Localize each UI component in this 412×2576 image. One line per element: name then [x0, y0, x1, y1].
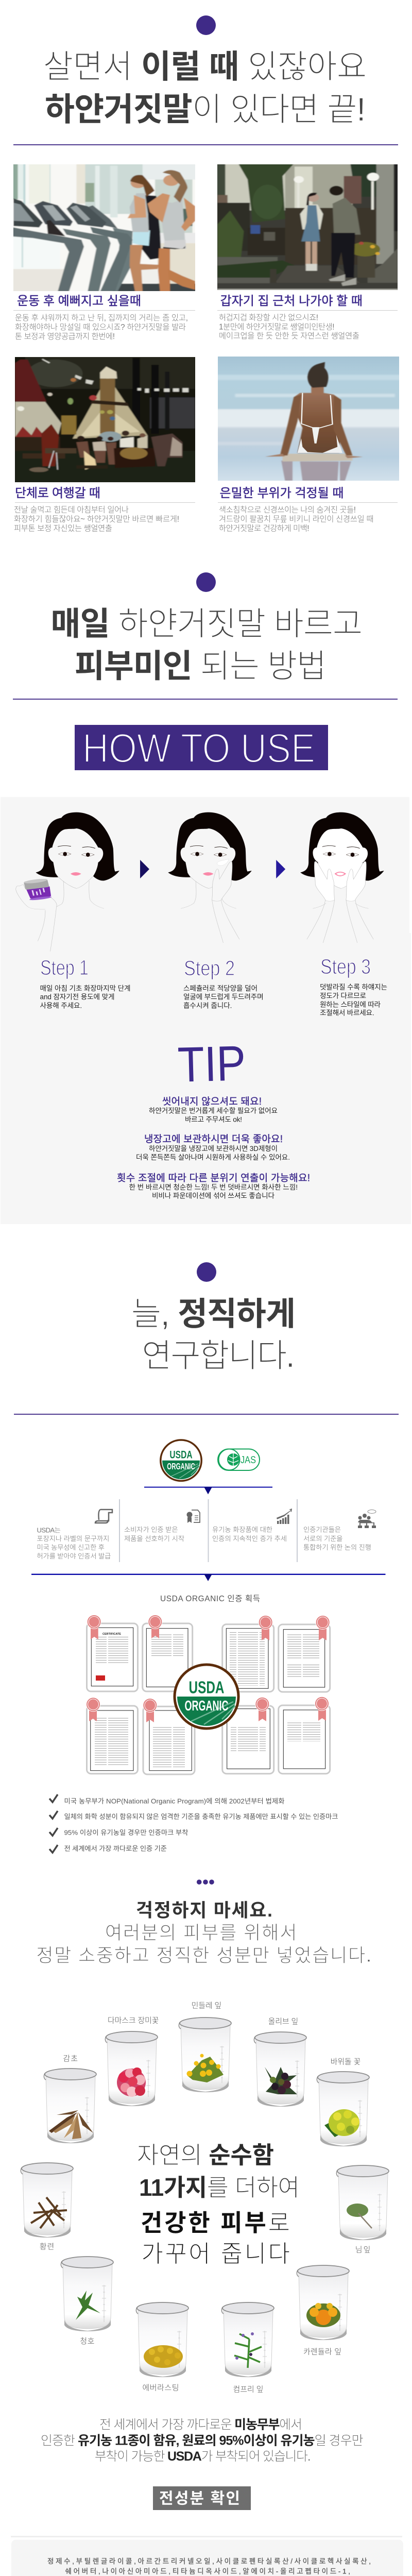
pointer line top	[144, 1487, 272, 1494]
paragraph: USDA statement: 부착이 가능한 USDA가 부착되어 있습니다.	[95, 2449, 311, 2464]
section dot	[196, 572, 216, 592]
step 3 text: 조절해서 바르세요.	[320, 1009, 374, 1017]
checklist: 미국 농무부가 NOP(National Organic Program)에 의해 2002년부터 법제화	[64, 1797, 284, 1805]
large USDA organic seal: USDA	[188, 1677, 225, 1697]
certificate 1: CERTIFICATE	[102, 1633, 121, 1636]
tip: adjust layers: 횟수 조절에 따라 다른 분위기 연출이 가능해요!	[117, 1173, 310, 1184]
beaker: sweet wormwood	[61, 2257, 113, 2346]
beaker: calendula leaf: 카렌듈라 잎	[303, 2347, 341, 2357]
beaker: comfrey leaf	[221, 2302, 274, 2394]
step 3 text: 덧발라질 수록 하얘지는	[320, 984, 387, 991]
beaker: everlasting	[136, 2302, 188, 2393]
title: always researching honestly: 늘, 정직하게	[131, 1296, 296, 1332]
column 3 text	[212, 1526, 287, 1543]
beaker: sweet wormwood: 청호	[80, 2337, 94, 2346]
tip: adjust layers	[117, 1173, 310, 1199]
logo: USDA organic: ORGANIC	[167, 1461, 195, 1471]
checklist: 일체의 화학 성분이 함유되지 않은 엄격한 기준을 충족한 유기농 제품에만 표시할 수 있는 인증마크	[64, 1813, 338, 1821]
large USDA organic seal: ORGANIC	[184, 1698, 229, 1714]
caption: after exercise: 운동 후 예뻐지고 싶을때	[17, 294, 141, 308]
section: honest research and certification	[14, 1262, 399, 1854]
caption: group trip	[14, 486, 195, 533]
beaker: coptis: 황련	[40, 2242, 54, 2251]
beaker: coptis	[21, 2163, 73, 2251]
column 1 text: 미국 농무성에 신고한 후	[37, 1544, 105, 1551]
beaker: rock flower: 바위돌 꽃	[331, 2058, 360, 2066]
slogan: natural purity	[137, 2142, 300, 2267]
caption: quick errand: 메이크업을 한 듯 안한 듯 자연스런 쌩얼연출	[219, 332, 359, 341]
button: view all ingredients: 전성분 확인	[159, 2490, 240, 2507]
column 4 text: 통합하기 위한 논의 진행	[303, 1544, 371, 1551]
icon: document scroll	[95, 1510, 112, 1523]
beaker: comfrey leaf: 컴프리 잎	[233, 2385, 264, 2394]
title: how to become beautiful	[50, 606, 363, 685]
title: when you need it: 하얀거짓말이 있다면 끝!	[45, 92, 366, 128]
title: how to become beautiful: 매일 하얀거짓말 바르고	[50, 606, 363, 642]
icon: people network	[358, 1510, 376, 1528]
logo: USDA organic: USDA	[169, 1449, 193, 1461]
caption: private areas	[218, 486, 398, 533]
heading: USDA organic certified: USDA ORGANIC 인증 획득	[160, 1594, 260, 1603]
step 3 text: 원하는 스타일에 따라	[320, 1001, 381, 1008]
panel: full ingredient list: 쉐어버터,나이아신아미아드,티타늄디옥사이드,알에이치-올리고펩타이드-1,	[65, 2568, 350, 2575]
caption: group trip: 화장하기 힘들잖아요~ 하얀거짓말만 바르면 빠르게!	[14, 515, 179, 524]
button: view all ingredients	[153, 2486, 251, 2510]
certificate 5	[87, 1698, 138, 1774]
logo: JAS	[218, 1449, 260, 1470]
beaker: dandelion leaf: 민들레 잎	[192, 2001, 221, 2010]
paragraph: USDA statement	[41, 2417, 364, 2464]
checklist	[49, 1794, 338, 1853]
certificate 8	[279, 1697, 330, 1774]
tip: no need to wash off: 씻어내지 않으셔도 돼요!	[162, 1096, 262, 1107]
tip: keep refrigerated: 냉장고에 보관하시면 더욱 좋아요!	[144, 1133, 283, 1145]
heading: don't worry: 걱정하지 마세요.	[136, 1900, 272, 1921]
photo: woman sitting at the beach	[218, 357, 399, 481]
certificate 2	[143, 1615, 193, 1691]
step 1 text: 매일 아침 기초 화장마지막 단계	[40, 985, 131, 992]
caption: private areas: 하얀거짓말로 건강하게 미백!	[219, 524, 309, 533]
arrow: step 2 to 3	[276, 860, 285, 878]
step 2 text: 얼굴에 부드럽게 두드려주며	[183, 993, 264, 1001]
step 1 figure with jar	[16, 812, 119, 952]
certificate 1	[87, 1615, 138, 1691]
certificate 3	[222, 1616, 274, 1692]
tip: keep refrigerated: 하얀거짓말을 냉장고에 보관하시면 3D제형이	[149, 1145, 278, 1153]
step 2 text: 흡수시켜 줍니다.	[183, 1002, 232, 1010]
step 1 text: 사용해 주세요.	[40, 1002, 82, 1010]
beaker: rock flower	[317, 2058, 369, 2146]
step 3 text: Step 3	[320, 955, 371, 978]
column 2 text: 제품을 선호하기 시작	[124, 1535, 184, 1543]
section: how to use	[1, 572, 411, 1224]
step 2 text: Step 2	[184, 956, 235, 980]
column 1 text	[37, 1526, 111, 1560]
paragraph: USDA statement: 전 세계에서 가장 까다로운 미농무부에서	[99, 2417, 302, 2432]
column 4 text	[303, 1526, 371, 1551]
certificate 7	[222, 1697, 274, 1774]
caption: quick errand: 허겁지겁 화장할 시간 없으시죠!	[219, 313, 318, 323]
tip: no need to wash off: 하얀거짓말은 번거롭게 세수할 필요가 없어요	[149, 1107, 278, 1115]
section dot	[197, 1262, 216, 1282]
step 3 text: 정도가 다르므로	[320, 992, 366, 999]
column 2 text	[124, 1526, 184, 1543]
step 2 text: 스페츌러로 적당양을 덜어	[183, 985, 258, 992]
caption: after exercise: 화장해야하나 망설일 때 있으시죠? 하얀거짓말을 발라	[15, 323, 186, 332]
column 3 text: 유기농 화장품에 대한	[212, 1526, 272, 1534]
beaker: licorice: 감초	[63, 2055, 78, 2063]
large USDA organic seal	[175, 1665, 238, 1728]
slogan: natural purity: 건강한 피부로	[141, 2209, 290, 2236]
tip: keep refrigerated	[136, 1133, 290, 1161]
caption: quick errand: 1분만에 하얀거짓말로 쌩얼미인탄생!	[219, 323, 335, 332]
checklist: 전 세계에서 가장 까다로운 인증 기준	[64, 1844, 167, 1852]
section dot	[196, 15, 216, 35]
beaker: dandelion leaf	[179, 2001, 231, 2092]
three dots	[197, 1879, 214, 1885]
column 3 text: 인증의 지속적인 증가 추세	[212, 1535, 287, 1543]
certificates grid	[87, 1615, 330, 1774]
paragraph: USDA statement: 인증한 유기농 11종이 함유, 원료의 95%이상이 유기농일 경우만	[41, 2434, 364, 2448]
slogan: natural purity: 11가지를 더하여	[139, 2174, 300, 2201]
beaker: olive leaf: 올리브 잎	[268, 2018, 298, 2026]
column 1 text: 허가를 받아야 인증서 발급	[37, 1552, 111, 1560]
tip: adjust layers: 한 번 바르시면 청순한 느낌! 두 번 덧바르시면 화사한 느낌!	[129, 1183, 298, 1191]
step 1 text	[40, 956, 131, 1010]
tip: keep refrigerated: 더욱 쫀득쫀득 살아나며 시원하게 사용하실 수 있어요.	[136, 1154, 290, 1161]
step 3 figure with cream on face	[300, 812, 384, 943]
beaker: damask rose: 다마스크 장미꽃	[108, 2016, 159, 2025]
title: always researching honestly: 연구합니다.	[142, 1338, 295, 1374]
caption: after exercise: 운동 후 샤워까지 하고 난 뒤, 집까지의 거리는 좀 있고,	[15, 314, 188, 323]
beaker: neem leaf	[336, 2165, 389, 2255]
photo: couple at night by the gate	[217, 164, 398, 290]
caption: private areas: 은밀한 부위가 걱정될 때	[219, 486, 344, 500]
column 4 text: 서로의 기준을	[303, 1535, 343, 1543]
tip: adjust layers: 비비나 파운데이션에 섞어 쓰셔도 좋습니다	[152, 1192, 274, 1199]
heading: don't worry	[36, 1900, 371, 1966]
beaker: damask rose	[105, 2016, 159, 2106]
panel: full ingredient list: 정제수,부틸렌글라이콜,아르간트리커넬오일,사이클로펜타실록산/사이클로헥사실록산,	[47, 2557, 371, 2565]
caption: quick errand	[217, 294, 398, 341]
title: when you need it: 살면서 이럴 때 있잖아요	[43, 49, 367, 85]
illustration: three application steps	[15, 812, 384, 952]
logo: USDA organic	[161, 1440, 201, 1481]
panel: usage steps and tips	[1, 797, 411, 1224]
certificate 6	[143, 1698, 195, 1774]
caption: group trip: 피부톤 보정 자신있는 쌩얼연출	[14, 524, 112, 533]
caption: private areas: 색소침착으로 신경쓰이는 나의 숨겨진 곳들!	[219, 506, 356, 514]
logo: JAS: JAS	[241, 1455, 256, 1466]
title: when you need it	[43, 49, 367, 128]
banner: how to use: HOW TO USE	[82, 725, 315, 771]
step 3 text	[320, 955, 387, 1017]
arrow: step 1 to 2	[140, 860, 149, 878]
column 2 text: 소비자가 인증 받은	[124, 1526, 178, 1534]
heading: don't worry: 여러분의 피부를 위해서	[105, 1922, 297, 1943]
column 4 text: 인증기관들은	[303, 1526, 341, 1534]
icon: growth chart	[277, 1509, 292, 1524]
TIP heading: TIP	[177, 1036, 246, 1093]
beaker: licorice	[44, 2055, 96, 2143]
tip: no need to wash off	[149, 1096, 278, 1123]
beaker: calendula leaf	[297, 2265, 349, 2357]
beaker: neem leaf: 님 잎	[355, 2245, 370, 2255]
beaker: everlasting: 에버라스팅	[142, 2383, 179, 2393]
caption: group trip: 전날 술먹고 힘든데 아침부터 일어나	[14, 506, 129, 514]
step 1 text: and 잠자기전 용도에 맞게	[40, 993, 114, 1001]
caption: after exercise	[13, 294, 195, 341]
USDA facts columns	[37, 1499, 376, 1562]
step 2 figure applying cream	[168, 812, 252, 943]
beaker: olive leaf	[254, 2018, 306, 2107]
pointer line bottom	[31, 1574, 385, 1581]
column 1 text: 포장지나 라벨의 문구까지	[37, 1535, 109, 1543]
slogan: natural purity: 자연의 순수함	[137, 2142, 274, 2168]
section: natural ingredients	[11, 1879, 403, 2576]
icon: certificate	[186, 1510, 200, 1523]
title: always researching honestly	[131, 1296, 296, 1374]
caption: private areas: 겨드랑이 팔꿈치 무릎 비키니 라인이 신경쓰일 때	[219, 515, 374, 524]
photo: group camping at night	[15, 357, 195, 482]
caption: group trip: 단체로 여행갈 때	[15, 486, 100, 500]
title: how to become beautiful: 피부미인 되는 방법	[75, 649, 327, 685]
panel: full ingredient list	[11, 2540, 403, 2576]
photo: treadmill runners	[13, 164, 195, 291]
step 1 text: Step 1	[40, 956, 89, 979]
step 2 text	[183, 956, 264, 1010]
column 1 text: USDA는	[37, 1526, 61, 1534]
certificate 4	[279, 1616, 330, 1692]
tip: no need to wash off: 바르고 주무셔도 ok!	[185, 1116, 242, 1123]
slogan: natural purity: 가꾸어 줍니다	[141, 2240, 290, 2267]
checklist: 95% 이상이 유기농일 경우만 인증마크 부착	[64, 1829, 188, 1836]
heading: don't worry: 정말 소중하고 정직한 성분만 넣었습니다.	[36, 1945, 371, 1966]
caption: after exercise: 톤 보정과 영양공급까지 한번에!	[15, 332, 115, 341]
caption: quick errand: 갑자기 집 근처 나가야 할 때	[220, 294, 363, 308]
section: when you need it	[13, 15, 399, 533]
